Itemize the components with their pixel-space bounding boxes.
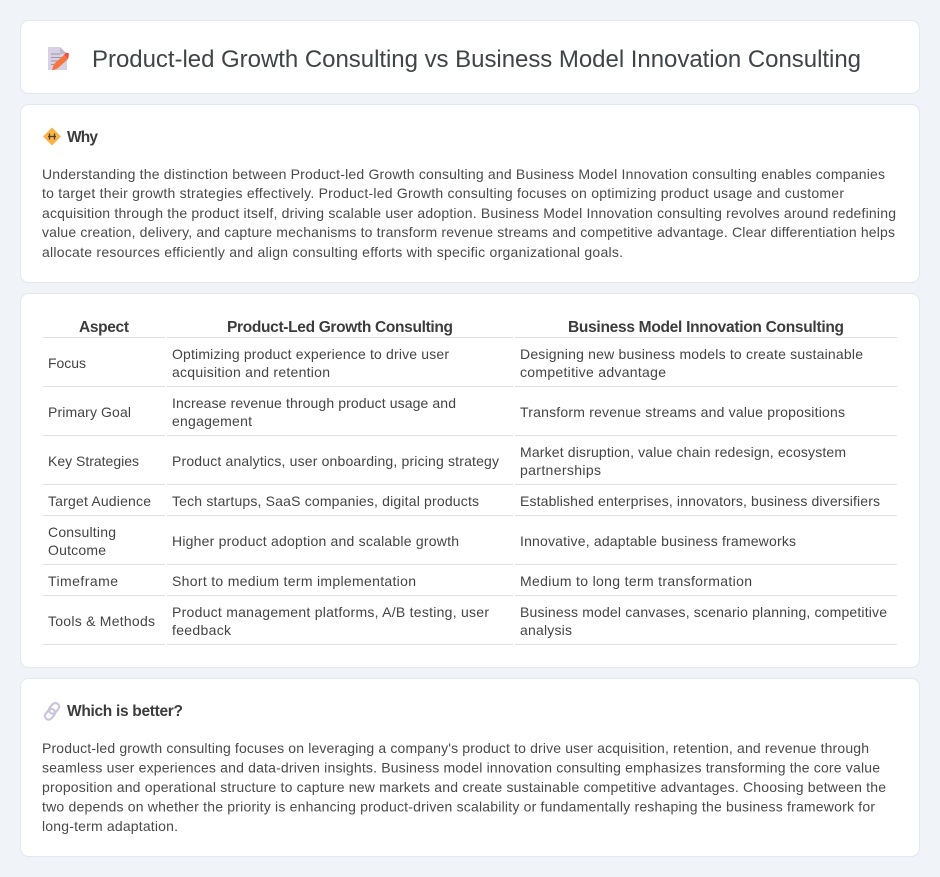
which is better text block: two depends on whether the priority is enhancing product-driven scalability or fundamentally reshaping the business framework for xyxy=(42,798,875,814)
icon: warning diamond xyxy=(44,128,60,144)
which is better text block: seamless user experiences and data-driven insights. Business model innovation consulting emphasizes transforming the core value xyxy=(42,760,880,776)
title: Product-led Growth Consulting vs Business Model Innovation Consulting xyxy=(92,46,861,73)
row: key strategies: Product analytics, user onboarding, pricing strategy xyxy=(172,453,499,469)
row: target audience: Target Audience xyxy=(48,493,151,509)
row: target audience: Established enterprises, innovators, business diversifiers xyxy=(520,493,880,509)
why text block: value creation, delivery, and capture mechanisms to transform revenue streams and competitive advantage. Clear differentiation helps xyxy=(42,224,895,240)
panel: title header xyxy=(20,20,920,94)
which is better text block xyxy=(42,740,886,834)
row: primary goal: Primary Goal xyxy=(48,404,131,420)
row: focus: Focus xyxy=(48,355,86,371)
row: consulting outcome xyxy=(48,524,796,558)
row: tools and methods: Business model canvases, scenario planning, competitive xyxy=(520,604,887,620)
row: key strategies xyxy=(48,444,846,478)
panel: which is better xyxy=(20,678,920,856)
row: primary goal: Increase revenue through product usage and xyxy=(172,395,456,411)
which is better text block: long-term adaptation. xyxy=(42,818,178,834)
icon: memo with pencil xyxy=(48,47,69,70)
row: consulting outcome: Innovative, adaptable business frameworks xyxy=(520,533,796,549)
which is better text block: Product-led growth consulting focuses on leveraging a company's product to drive user acquisition, retention, and revenue through xyxy=(42,740,869,756)
row: tools and methods: Tools & Methods xyxy=(48,613,155,629)
row: focus: Optimizing product experience to drive user xyxy=(172,346,449,362)
row: key strategies: partnerships xyxy=(520,462,601,478)
row: timeframe: Medium to long term transformation xyxy=(520,573,752,589)
row: consulting outcome: Consulting xyxy=(48,524,116,540)
row: tools and methods: analysis xyxy=(520,622,572,638)
icon: link xyxy=(43,702,61,721)
why text block: acquisition through the product itself, driving scalable user adoption. Business Model Innovation consulting revolves around redefining xyxy=(42,205,896,221)
row: focus: competitive advantage xyxy=(520,364,666,380)
why text block: Understanding the distinction between Product-led Growth consulting and Business Model Innovation consulting enables companies xyxy=(42,166,885,182)
why text block: allocate resources efficiently and align consulting efforts with specific organizational goals. xyxy=(42,244,623,260)
row: consulting outcome: Higher product adoption and scalable growth xyxy=(172,533,459,549)
row: primary goal: engagement xyxy=(172,413,252,429)
row: tools and methods: Product management platforms, A/B testing, user xyxy=(172,604,489,620)
row: timeframe: Timeframe xyxy=(48,573,118,589)
panel: why xyxy=(20,104,920,282)
table header row: Aspect xyxy=(79,319,129,336)
row: key strategies: Market disruption, value chain redesign, ecosystem xyxy=(520,444,846,460)
table header row: Product-Led Growth Consulting xyxy=(227,319,453,336)
heading: why: Why xyxy=(67,129,98,146)
which is better text block: proposition and operational structure to capture new markets and create sustainable competitive advantages. Choosing between the xyxy=(42,779,886,795)
row: primary goal xyxy=(48,395,845,429)
row: primary goal: Transform revenue streams and value propositions xyxy=(520,404,845,420)
row: focus: acquisition and retention xyxy=(172,364,330,380)
table header row: Business Model Innovation Consulting xyxy=(568,319,844,336)
row: consulting outcome: Outcome xyxy=(48,542,106,558)
row: timeframe xyxy=(48,573,752,589)
row: target audience: Tech startups, SaaS companies, digital products xyxy=(172,493,479,509)
row: key strategies: Key Strategies xyxy=(48,453,139,469)
heading: which is better: Which is better? xyxy=(67,703,183,720)
row: target audience xyxy=(48,493,880,509)
row: focus xyxy=(48,346,863,380)
why text block: to target their growth strategies effectively. Product-led Growth consulting focuses on optimizing product usage and customer xyxy=(42,185,844,201)
row: tools and methods: feedback xyxy=(172,622,232,638)
row: focus: Designing new business models to create sustainable xyxy=(520,346,863,362)
panel: comparison table xyxy=(20,294,920,668)
why text block xyxy=(42,166,896,260)
table header row xyxy=(79,319,844,336)
row: timeframe: Short to medium term implementation xyxy=(172,573,416,589)
row: tools and methods xyxy=(48,604,887,638)
